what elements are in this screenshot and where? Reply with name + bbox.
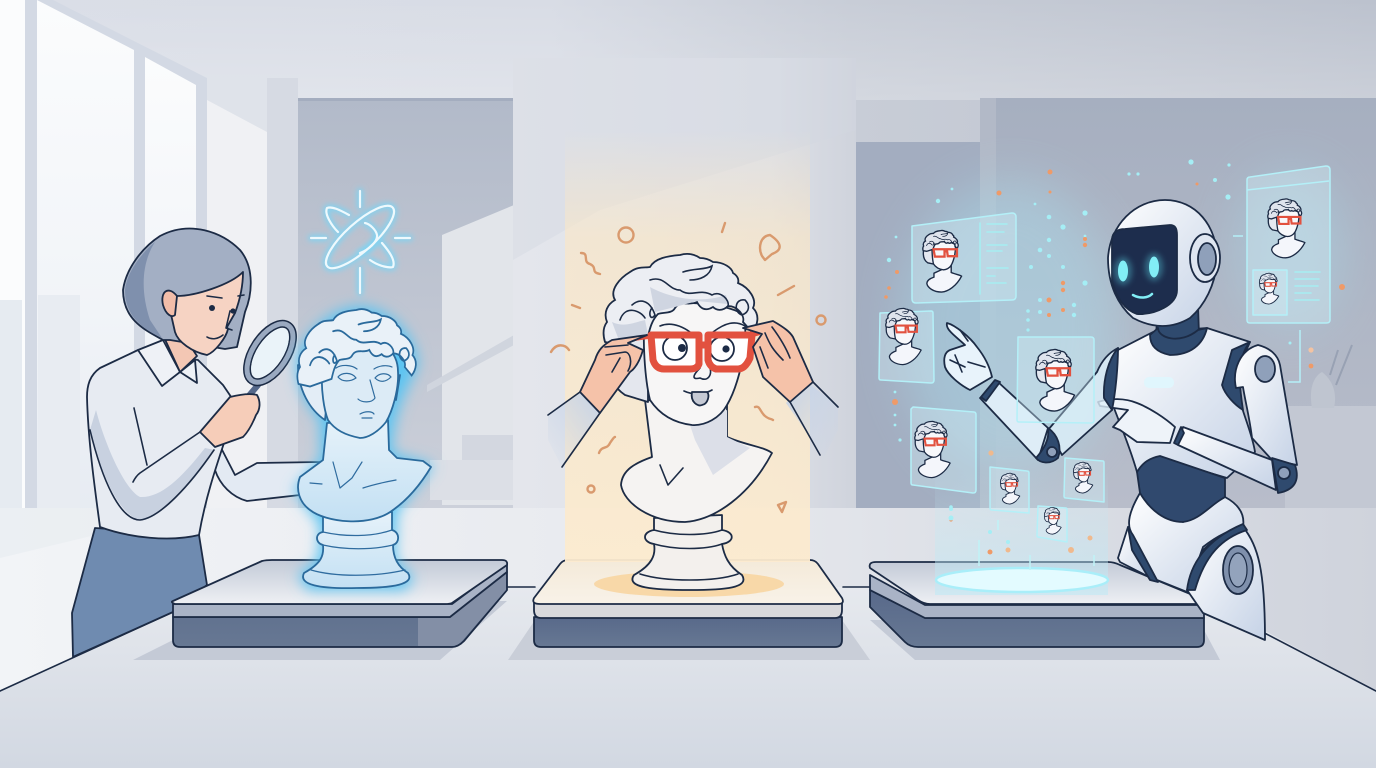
pelvis [1129, 493, 1243, 592]
torso [621, 400, 772, 522]
eyes and smile [1114, 253, 1163, 298]
far arm [215, 440, 320, 501]
hologram panel: small two [1064, 458, 1104, 502]
left platform [172, 560, 507, 647]
centre bust [604, 254, 772, 590]
side hair [606, 330, 648, 402]
neon icon [311, 191, 410, 293]
pointing hand [944, 323, 992, 390]
chest light [1144, 377, 1174, 388]
glasses [627, 330, 760, 370]
hair [604, 254, 757, 345]
woman [72, 229, 320, 657]
hair back [123, 229, 251, 349]
base [303, 512, 409, 588]
doodles around centre bust [551, 223, 826, 512]
brows, nose, mouth, tongue [660, 323, 745, 394]
collar [1150, 328, 1207, 355]
central pillar [513, 58, 856, 520]
left hand [580, 335, 647, 413]
face features [336, 365, 392, 418]
column [207, 78, 267, 512]
torso [298, 420, 431, 521]
abdomen [1137, 456, 1225, 522]
hologram ambient glow [900, 180, 1120, 480]
window wall [0, 0, 207, 560]
robot right arm [1098, 342, 1297, 493]
torso [1108, 328, 1255, 478]
left bust [297, 309, 431, 588]
right hand [743, 321, 813, 402]
robot left arm [944, 323, 1118, 463]
hologram panel: centre [1017, 337, 1094, 423]
hologram panel: small three [1037, 506, 1067, 542]
visor [1112, 225, 1177, 314]
eyes and mouth [207, 295, 244, 339]
knee [1223, 546, 1253, 594]
collar [138, 340, 197, 386]
magnifier [238, 316, 302, 398]
centre platform [533, 560, 843, 647]
hand [200, 394, 260, 447]
neck [163, 330, 197, 372]
data particles [884, 159, 1345, 570]
face [644, 303, 745, 425]
ear [162, 291, 177, 316]
hologram panel: left [879, 308, 934, 383]
hands adjusting glasses [580, 321, 813, 413]
floor [0, 508, 1376, 768]
hologram panel: top right [1233, 166, 1330, 382]
right wall [856, 98, 1376, 510]
hair [297, 309, 416, 386]
table [0, 587, 1376, 768]
face [322, 338, 398, 438]
ear [1190, 234, 1220, 282]
hologram beam [935, 470, 1108, 595]
right platform [870, 562, 1204, 647]
hologram panel: lower left [911, 407, 976, 493]
hologram panel: small one [990, 467, 1029, 513]
warm light beam [565, 130, 810, 562]
hologram panel: top left [912, 213, 1016, 303]
back wall with stair [298, 98, 514, 508]
glow behind left bust [294, 306, 434, 590]
front leg [1187, 527, 1265, 640]
torso and shirt [87, 350, 240, 538]
neck [1155, 305, 1199, 345]
hologram disc [936, 568, 1108, 592]
near arm [90, 408, 214, 520]
base [632, 515, 743, 590]
side hair [298, 365, 400, 420]
warm disc on platform [594, 571, 784, 597]
centre sleeves [548, 382, 838, 467]
back leg [1118, 527, 1155, 580]
robot body [1108, 305, 1265, 640]
robot head [1108, 200, 1220, 326]
face [170, 272, 243, 355]
ceiling [0, 0, 1376, 150]
skirt [72, 528, 207, 657]
